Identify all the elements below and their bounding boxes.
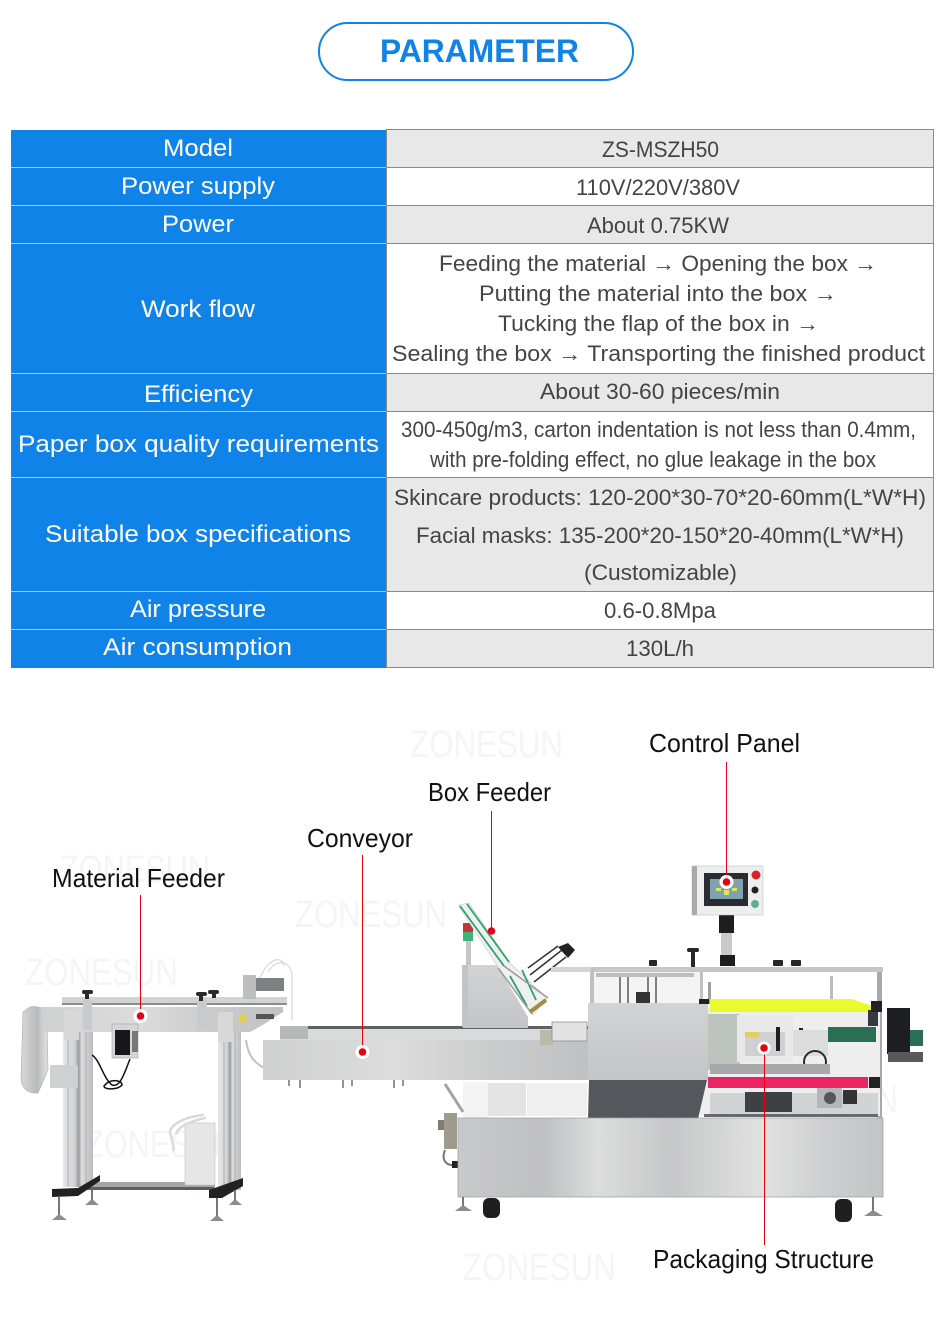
callout: Material Feeder — [52, 863, 225, 1023]
air regulator — [438, 1113, 458, 1168]
row: Efficiency: Efficiency — [144, 381, 253, 408]
row: Air consumption — [103, 634, 694, 661]
feeder end guard — [21, 1007, 48, 1093]
feeder belt body — [40, 1007, 283, 1032]
row: Power: About 0.75KW — [587, 213, 729, 238]
row: Suitable box specifications: (Customizable) — [584, 560, 737, 585]
watermarks: ZONESUN — [295, 894, 447, 936]
feeder power supply — [170, 1115, 215, 1185]
machine: material feeder — [21, 960, 292, 1221]
top knobs — [649, 948, 801, 967]
watermarks: ZONESUN — [745, 1079, 898, 1121]
row: Suitable box specifications: Suitable box specifications — [45, 521, 351, 548]
row: Efficiency: About 30-60 pieces/min — [540, 379, 780, 404]
row: Power — [162, 211, 729, 238]
pink band — [708, 1077, 868, 1088]
yellow band — [710, 999, 872, 1012]
feeder control box — [112, 1024, 138, 1058]
box feeder cylinders — [528, 943, 575, 982]
row: Paper box quality requirements: Paper box quality requirements — [18, 431, 379, 458]
callout: Control Panel — [649, 728, 800, 889]
parameter table — [11, 130, 934, 668]
row: Air pressure — [130, 596, 717, 623]
machine: conveyor — [263, 1022, 590, 1088]
band clamps — [699, 999, 882, 1088]
callout: Box Feeder — [428, 777, 551, 935]
row: Work flow: Work flow — [141, 296, 256, 323]
callout: Packaging Structure — [653, 1042, 874, 1274]
callout: Material Feeder: Material Feeder — [52, 863, 225, 893]
row: Power supply: 110V/220V/380V — [576, 175, 740, 200]
feeder legs — [50, 1012, 241, 1190]
title: PARAMETER pill: PARAMETER — [380, 33, 579, 69]
row: Work flow: Putting the material into the box → — [479, 281, 837, 306]
control panel — [692, 866, 763, 915]
feeder base frame and feet — [52, 1175, 243, 1221]
box feeder chute — [458, 903, 548, 1015]
row: Paper box quality requirements: with pre-folding effect, no glue leakage in the box — [429, 447, 876, 472]
row: Paper box quality requirements: 300-450g/m3, carton indentation is not less than 0.4mm, — [401, 417, 916, 442]
row: Model — [163, 135, 719, 162]
row: Suitable box specifications — [45, 485, 926, 585]
row: Air pressure: Air pressure — [130, 596, 266, 623]
callout: Packaging Structure: Packaging Structure — [653, 1244, 874, 1274]
row: Power: Power — [162, 211, 234, 238]
machine: packaging machine — [438, 866, 923, 1222]
row: Paper box quality requirements — [18, 417, 916, 472]
grey front cover — [588, 1003, 708, 1119]
watermarks: ZONESUN — [85, 1124, 235, 1166]
row: Air pressure: 0.6-0.8Mpa — [604, 598, 717, 623]
watermarks: ZONESUN — [410, 724, 563, 766]
stainless base cabinet — [458, 1118, 883, 1197]
control panel column — [719, 915, 735, 966]
row: Work flow: Feeding the material → Opening the box → — [439, 251, 877, 276]
feeder sensor and tubing — [243, 960, 292, 1068]
callout: Control Panel: Control Panel — [649, 728, 800, 758]
row: Work flow: Tucking the flap of the box in → — [498, 311, 819, 336]
row: Work flow — [141, 251, 925, 366]
right green belt and motor — [828, 1008, 923, 1062]
cabinet interior lower section — [445, 1082, 587, 1118]
row: Power supply — [121, 173, 740, 200]
row: Model: ZS-MSZH50 — [602, 137, 719, 162]
casters and feet — [455, 1197, 883, 1222]
callout: Conveyor: Conveyor — [307, 823, 413, 853]
row: Efficiency — [144, 379, 780, 408]
watermarks: ZONESUN — [463, 1247, 616, 1289]
stack light — [463, 923, 473, 965]
callout: Box Feeder: Box Feeder — [428, 777, 551, 807]
feeder cable — [92, 1055, 130, 1089]
packaging upper frame — [551, 967, 883, 1118]
row: Suitable box specifications: Skincare products: 120-200*30-70*20-60mm(L*W*H) — [394, 485, 926, 510]
row: Work flow: Sealing the box → Transporting the finished product — [392, 341, 925, 366]
hopper column — [463, 965, 528, 1028]
row: Suitable box specifications: Facial masks: 135-200*20-150*20-40mm(L*W*H) — [416, 523, 904, 548]
title: PARAMETER pill — [319, 23, 633, 80]
feeder warning sign — [238, 1012, 248, 1021]
row: Air consumption: 130L/h — [626, 636, 694, 661]
table row backgrounds — [11, 130, 934, 668]
feeder top rail — [62, 997, 287, 1042]
feeder knobs — [82, 990, 219, 1001]
row: Power supply: Power supply — [121, 173, 275, 200]
watermarks — [25, 724, 898, 1289]
row: Model: Model — [163, 135, 233, 162]
watermarks: ZONESUN — [25, 952, 178, 994]
callout: Conveyor — [307, 823, 413, 1059]
row: Air consumption: Air consumption — [103, 634, 292, 661]
watermarks: ZONESUN — [60, 849, 210, 891]
packaging mechanism — [704, 1014, 878, 1117]
